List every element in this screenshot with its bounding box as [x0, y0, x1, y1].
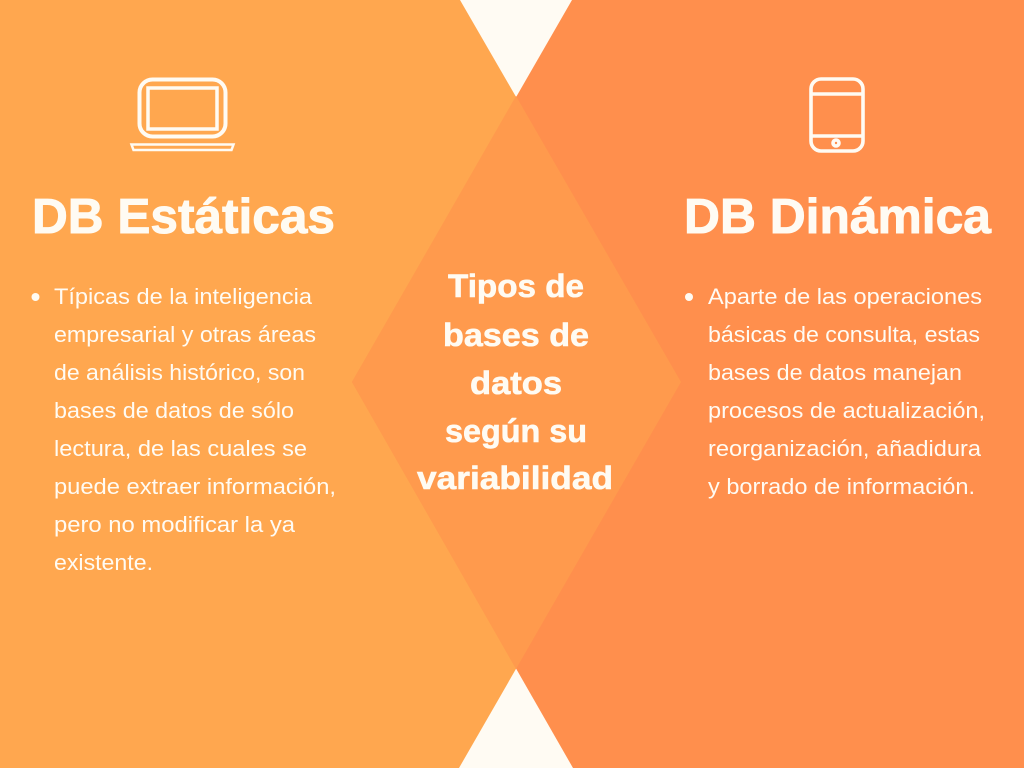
- heading: DB Dinámica: DB Dinámica: [684, 190, 992, 244]
- panel: left orange shape: [0, 0, 681, 768]
- text block: center title: según su: [445, 413, 587, 449]
- text block: right bullet: y borrado de información.: [708, 474, 975, 499]
- heading: DB Estáticas: DB Estáticas: [32, 190, 335, 244]
- text block: left bullet: pero no modificar la ya: [54, 512, 296, 537]
- text block: right bullet: [685, 284, 985, 499]
- text block: center title: datos: [470, 365, 562, 401]
- text block: left bullet: de análisis histórico, son: [54, 360, 305, 385]
- text block: left bullet: empresarial y otras áreas: [54, 322, 316, 347]
- icon: laptop: [132, 80, 234, 150]
- panel: right orange shape: [352, 0, 1024, 768]
- panel: center diamond overlap: [352, 96, 681, 669]
- text block: right bullet: procesos de actualización,: [708, 398, 985, 423]
- text block: center title: Tipos de: [448, 268, 584, 304]
- text block: left bullet: Típicas de la inteligencia: [54, 284, 313, 309]
- text block: center title: bases de: [443, 317, 589, 353]
- text block: left bullet: puede extraer información,: [54, 474, 336, 499]
- text block: right bullet: bases de datos manejan: [708, 360, 962, 385]
- icon: tablet: [811, 79, 863, 151]
- text block: right bullet: básicas de consulta, estas: [708, 322, 980, 347]
- text block: center title: [417, 268, 613, 496]
- text block: left bullet: lectura, de las cuales se: [54, 436, 307, 461]
- text block: left bullet: existente.: [54, 550, 153, 575]
- text block: right bullet: Aparte de las operaciones: [708, 284, 982, 309]
- text block: left bullet: bases de datos de sólo: [54, 398, 294, 423]
- text block: right bullet: reorganización, añadidura: [708, 436, 982, 461]
- text block: left bullet: [32, 284, 336, 575]
- text block: center title: variabilidad: [417, 460, 613, 496]
